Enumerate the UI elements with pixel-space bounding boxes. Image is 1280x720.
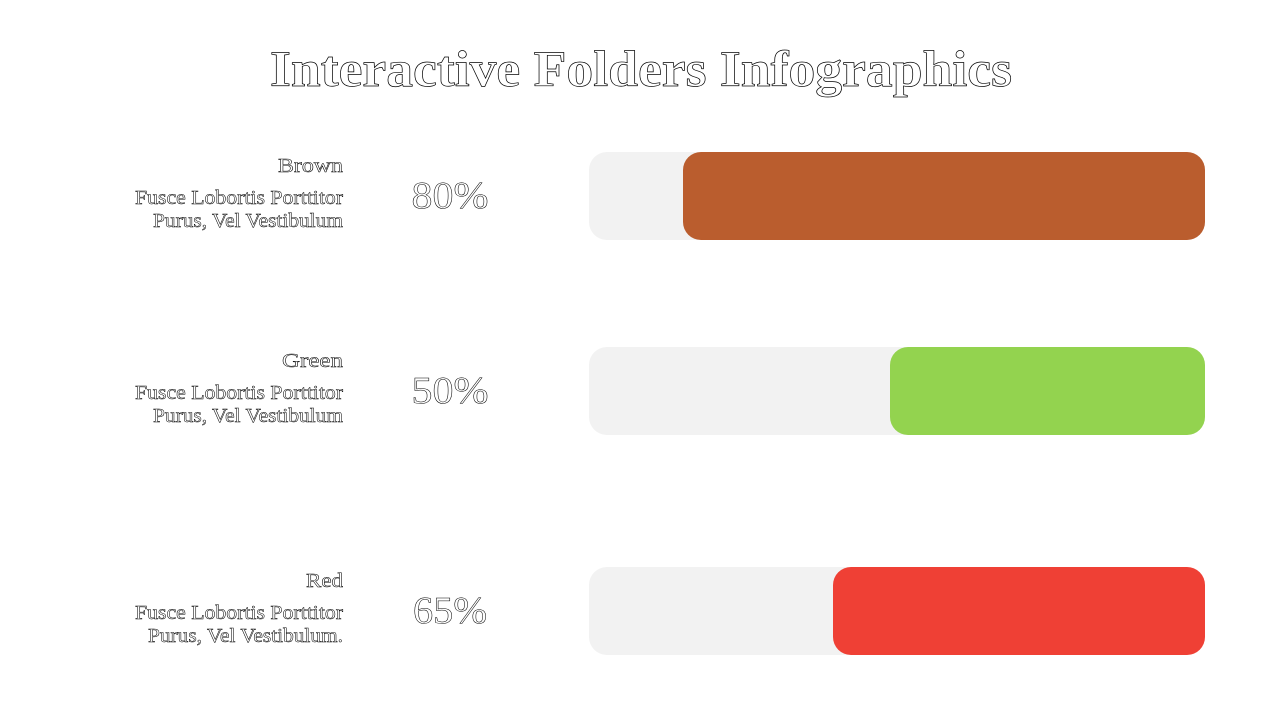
panel: red row: [135, 567, 1205, 655]
red percentage: 65%: [413, 590, 487, 632]
brown label: Brown: [278, 155, 343, 177]
panel: green row: [135, 347, 1205, 435]
red description: Purus, Vel Vestibulum.: [148, 625, 343, 647]
red label: Red: [306, 570, 343, 592]
red bar: [589, 567, 1205, 655]
green description: Purus, Vel Vestibulum: [153, 405, 343, 427]
green bar: [589, 347, 1205, 435]
green percentage: 50%: [412, 370, 488, 412]
red description: Fusce Lobortis Porttitor: [135, 602, 343, 624]
brown percentage: 80%: [412, 175, 488, 217]
panel: brown row: [135, 152, 1205, 240]
brown description: [135, 187, 343, 232]
green description: [135, 382, 343, 427]
brown bar: [589, 152, 1205, 240]
brown description: Purus, Vel Vestibulum: [153, 210, 343, 232]
title: Interactive Folders Infographics: [270, 42, 1012, 98]
green label: Green: [282, 350, 343, 372]
red description: [135, 602, 343, 647]
green description: Fusce Lobortis Porttitor: [135, 382, 343, 404]
brown description: Fusce Lobortis Porttitor: [135, 187, 343, 209]
